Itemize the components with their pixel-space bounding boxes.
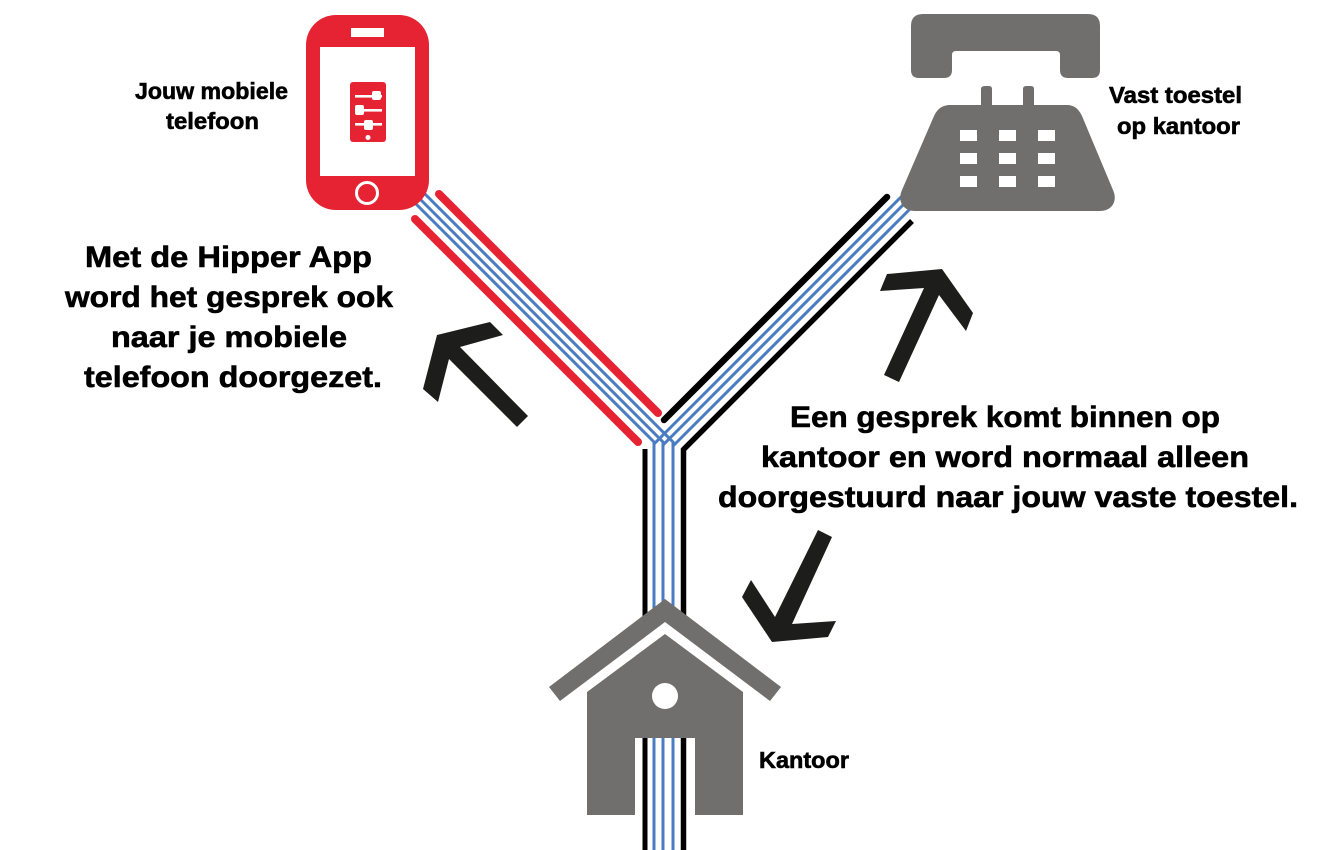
text block: normal call routing: kantoor en word normaal alleen	[761, 441, 1249, 474]
text block: normal call routing	[718, 401, 1298, 514]
label: office: Kantoor	[759, 747, 849, 773]
icon: desk phone	[900, 14, 1115, 211]
text block: Hipper App	[64, 241, 393, 394]
arrow: towards office	[742, 530, 836, 642]
text block: normal call routing: doorgestuurd naar jouw vaste toestel.	[718, 481, 1298, 514]
arrow: towards desk phone	[880, 269, 973, 382]
icon: mobile phone	[306, 15, 429, 210]
text block: Hipper App: telefoon doorgezet.	[84, 361, 382, 394]
text block: normal call routing: Een gesprek komt binnen op	[790, 401, 1220, 434]
label: desk phone: op kantoor	[1117, 113, 1240, 139]
cables: desk phone branch and trunk	[645, 193, 915, 850]
text block: Hipper App: word het gesprek ook	[64, 281, 393, 314]
label: mobile phone: Jouw mobiele	[135, 78, 288, 104]
arrow: towards mobile phone	[423, 322, 528, 427]
label: desk phone	[1109, 82, 1242, 139]
icon: office building	[549, 599, 781, 815]
label: mobile phone: telefoon	[166, 108, 259, 134]
text block: Hipper App: naar je mobiele	[111, 321, 347, 354]
text block: Hipper App: Met de Hipper App	[85, 241, 372, 274]
icon: app with sliders	[350, 82, 386, 142]
label: mobile phone	[135, 78, 288, 134]
label: desk phone: Vast toestel	[1109, 82, 1242, 108]
cables: phone branch	[415, 184, 673, 850]
